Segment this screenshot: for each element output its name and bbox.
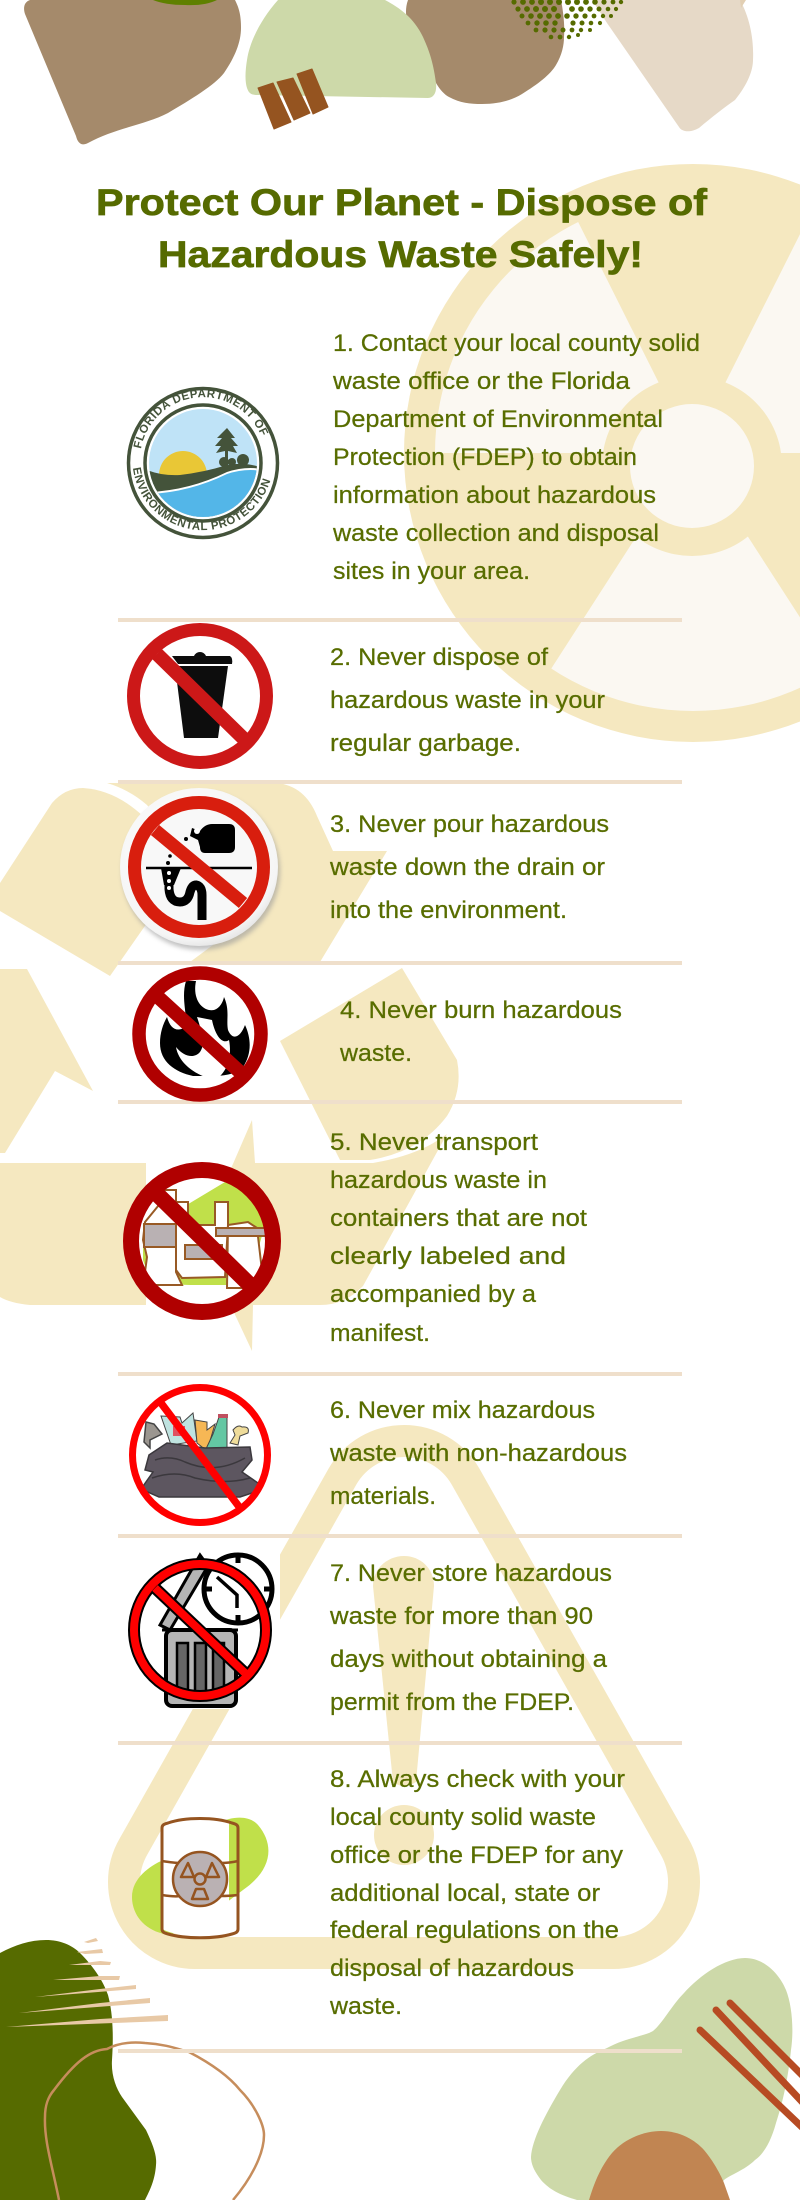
icon: no mixing waste xyxy=(132,1388,268,1522)
step 1 text xyxy=(332,330,700,585)
step 4 text: waste. xyxy=(339,1040,412,1067)
icon: no pouring down the drain xyxy=(120,788,280,950)
step 3 text: waste down the drain or xyxy=(329,854,605,881)
decoration: bottom right shapes xyxy=(531,1958,800,2200)
step 3 text: into the environment. xyxy=(330,897,567,924)
step 7 text: 7. Never store hazardous xyxy=(330,1560,612,1587)
step 8 text: waste. xyxy=(329,1993,402,2020)
step 5 text: manifest. xyxy=(330,1320,430,1347)
step 6 text: waste with non-hazardous xyxy=(329,1440,627,1467)
step 7 text: waste for more than 90 xyxy=(329,1603,593,1630)
step 1 text: information about hazardous xyxy=(333,482,656,509)
white backing of icon 7 xyxy=(130,1540,280,1709)
background: recycling symbol xyxy=(0,783,459,1351)
step 5 text: containers that are not xyxy=(330,1205,587,1232)
step 5 text: 5. Never transport xyxy=(330,1129,538,1156)
icon: no burning xyxy=(139,973,261,1095)
step 5 text xyxy=(330,1129,587,1347)
step 1 text: waste office or the Florida xyxy=(332,368,631,395)
title xyxy=(96,182,708,275)
background: warning triangle xyxy=(124,1441,684,1953)
step 8 text: additional local, state or xyxy=(330,1880,600,1907)
step 4 text xyxy=(339,997,622,1067)
step 8 text xyxy=(329,1766,625,2020)
icon: no unlabeled containers xyxy=(131,1170,273,1312)
step 7 text: days without obtaining a xyxy=(330,1646,608,1673)
step 1 text: sites in your area. xyxy=(333,558,530,585)
step 2 text: hazardous waste in your xyxy=(330,687,605,714)
step 1 text: 1. Contact your local county solid xyxy=(333,330,700,357)
step 6 text: 6. Never mix hazardous xyxy=(330,1397,595,1424)
step 2 text xyxy=(330,644,605,757)
step 3 text: 3. Never pour hazardous xyxy=(330,811,609,838)
icon: no long-term storage xyxy=(134,1553,274,1706)
icon: Florida DEP seal: ENVIRONMENTAL PROTECTION xyxy=(133,467,270,530)
step 7 text xyxy=(329,1560,612,1716)
step 1 text: waste collection and disposal xyxy=(332,520,659,547)
step 3 text xyxy=(329,811,609,924)
step 1 text: Protection (FDEP) to obtain xyxy=(333,444,637,471)
title: Hazardous Waste Safely! xyxy=(158,234,643,275)
background: radiation symbol xyxy=(404,164,800,742)
step 5 text: hazardous waste in xyxy=(330,1167,547,1194)
icon: no garbage bin xyxy=(134,630,266,762)
step 8 text: local county solid waste xyxy=(330,1804,596,1831)
icon: hazardous waste barrel xyxy=(132,1818,268,1938)
step 2 text: 2. Never dispose of xyxy=(330,644,548,671)
decoration: top shapes xyxy=(24,0,753,144)
row dividers xyxy=(118,618,682,2053)
decoration: bottom left shapes xyxy=(0,1938,264,2200)
step 8 text: federal regulations on the xyxy=(330,1917,619,1944)
step 5 text: clearly labeled and xyxy=(330,1243,566,1270)
step 6 text: materials. xyxy=(330,1483,436,1510)
step 5 text: accompanied by a xyxy=(330,1281,537,1308)
icon: Florida DEP seal: FLORIDA DEPARTMENT OF xyxy=(133,390,268,448)
step 6 text xyxy=(329,1397,627,1510)
step 8 text: 8. Always check with your xyxy=(330,1766,625,1793)
step 2 text: regular garbage. xyxy=(330,730,521,757)
step 8 text: disposal of hazardous xyxy=(330,1955,574,1982)
step 8 text: office or the FDEP for any xyxy=(330,1842,623,1869)
icon: Florida DEP seal xyxy=(126,386,280,540)
title: Protect Our Planet - Dispose of xyxy=(96,182,708,223)
step 4 text: 4. Never burn hazardous xyxy=(340,997,622,1024)
step 7 text: permit from the FDEP. xyxy=(330,1689,574,1716)
step 1 text: Department of Environmental xyxy=(333,406,663,433)
